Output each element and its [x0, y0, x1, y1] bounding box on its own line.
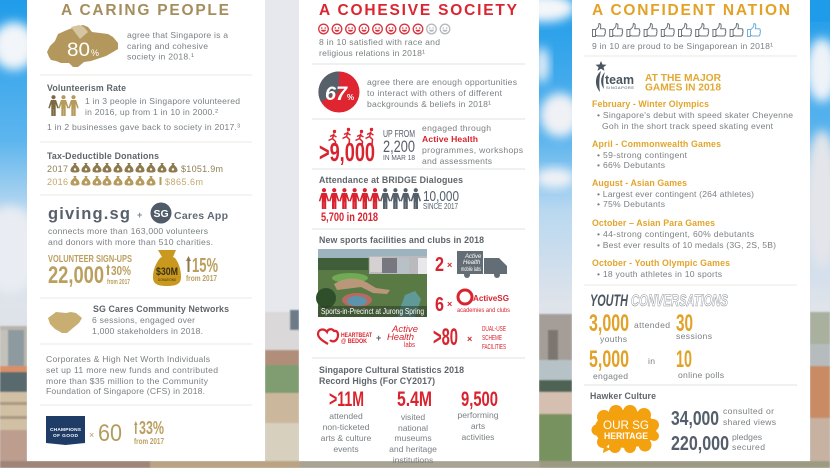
stat: 3,000 youths attended 30 sessions: 30 [676, 310, 693, 337]
text: active health: and assessments [422, 156, 492, 166]
stat: volunteer sign-ups [48, 253, 132, 289]
stat: 5,000 engaged in 10 online polls [589, 346, 724, 381]
list: asian para games: October – Asian Para Games [592, 218, 715, 228]
heading: a confident nation: A CONFIDENT NATION [592, 2, 790, 19]
stat: 5,700 in 2018: 5,700 in 2018 [321, 210, 378, 224]
stat: 6 activesg academies and clubs: × [447, 299, 452, 309]
list: commonwealth games: • 59-strong contingent [597, 150, 688, 160]
logo: team singapore: team [605, 72, 634, 87]
stat: 5,000 engaged in 10 online polls: in [648, 356, 655, 366]
stat: 5.4m visited: institutions [393, 455, 433, 465]
text: opportunities to interact: agree there are enough opportunities [367, 77, 517, 87]
icon: handshake [48, 312, 82, 333]
stat: 34,000 consulted: 34,000 [671, 408, 719, 430]
list: commonwealth games: • 66% Debutants [597, 160, 665, 170]
stat: 3,000 youths attended 30 sessions: youths [600, 334, 627, 344]
logo: sg cares app [150, 202, 228, 224]
stat: >80 dual-use scheme facilities: × [467, 334, 472, 344]
icon: singapore map 80% [47, 25, 118, 67]
list: asian para games: • 44-strong contingent, 60% debutants [597, 229, 754, 239]
stat: 5.4m visited: 5.4M [397, 388, 432, 411]
heading: youth conversations [590, 291, 728, 310]
stat: 3,000 youths attended 30 sessions: 3,000 [589, 310, 629, 337]
icon row: runners [328, 128, 374, 146]
stat: >80 dual-use scheme facilities [433, 324, 506, 351]
stat: volunteer sign-ups: VOLUNTEER SIGN-UPS [48, 253, 132, 265]
logo: heartbeat @ bedok: HEARTBEAT [341, 333, 372, 339]
chart: donations 2017: $1051.9m [181, 164, 223, 174]
stat: 3,000 youths attended 30 sessions: attended [634, 320, 670, 330]
list: winter olympics: February - Winter Olympics [592, 99, 709, 109]
stat: 5.4m visited: visited [401, 412, 425, 422]
text: corporates and cfs [46, 354, 218, 396]
text: corporates and cfs: more than $35 million to the Community [46, 376, 209, 386]
heading: volunteerism rate: Volunteerism Rate [47, 83, 126, 93]
stat: 6 activesg academies and clubs: ActiveSG [473, 293, 509, 303]
stat: donations up 15%: from 2017 [186, 273, 217, 283]
stat: 9,500 performing [457, 388, 499, 442]
logo: heartbeat @ bedok: @ BEDOK [341, 339, 368, 345]
text: race relations: religious relations in 2018¹ [319, 48, 425, 58]
text: volunteer rate [47, 96, 240, 132]
text: active health: Active Health [422, 134, 478, 144]
stat: 3,000 youths attended 30 sessions: sessions [676, 331, 712, 341]
text: corporates and cfs: Corporates & High Net Worth Individuals [46, 354, 210, 364]
heading: cultural statistics [319, 365, 464, 386]
chart: donations 2016 [47, 176, 203, 187]
text: giving.sg description: and donors with more than 510 charities. [48, 237, 213, 247]
icon row: thumbs up [592, 24, 761, 36]
icon row: smileys [319, 24, 450, 34]
badge: our sg heritage: HERITAGE [604, 431, 648, 442]
heading: at the major games: AT THE MAJOR [645, 72, 721, 84]
logo: giving.sg: giving.sg [48, 205, 130, 223]
heading: tax-deductible donations: Tax-Deductible Donations [47, 151, 159, 161]
stat: up from 2,200 [383, 129, 415, 162]
text: opportunities to interact [367, 77, 517, 109]
logo: sg cares app: Cares App [174, 210, 228, 222]
logo: active health labs: labs [404, 342, 415, 349]
stat: 220,000 pledges: 220,000 [671, 433, 729, 455]
text: active health: engaged through [422, 123, 491, 133]
badge: our sg heritage: OUR SG [603, 418, 649, 432]
chart: donations 2017: 2017 [47, 164, 68, 174]
icon: singapore map 80%: 80 [67, 40, 90, 61]
plus sign: + [376, 333, 381, 343]
stat: 6 activesg academies and clubs: 6 [435, 294, 444, 316]
stat: 5.4m visited: museums [394, 433, 432, 443]
stat: >80 dual-use scheme facilities: FACILITIES [482, 344, 506, 351]
text: sg cares community networks: 1,000 stakeholders in 2018. [92, 326, 203, 336]
text: caring statistic: society in 2018.¹ [127, 52, 194, 62]
stat: >80 dual-use scheme facilities: >80 [433, 324, 458, 351]
stat: >11m attended: arts & culture [321, 433, 372, 443]
stat: >11m attended: >11M [329, 388, 364, 411]
list: asian games: August - Asian Games [592, 178, 687, 188]
text: volunteer rate: 1 in 2 businesses gave back to society in 2017.³ [47, 122, 240, 132]
text: race relations: 8 in 10 satisfied with race and [319, 37, 440, 47]
stat: up 33%: 33% [139, 418, 164, 438]
text: active health [422, 123, 523, 166]
text: sg cares community networks: SG Cares Community Networks [93, 304, 229, 314]
panel: a caring people [27, 0, 265, 461]
text: race relations [319, 37, 440, 58]
logo: sg cares app: SG [154, 208, 169, 220]
list: asian para games [592, 218, 776, 250]
stat: volunteer sign-ups: 22,000 [48, 262, 104, 289]
stat: 5,000 engaged in 10 online polls: online polls [678, 370, 724, 380]
chart: donations 2016: $865.6m [165, 177, 203, 187]
stat: 2 mobile labs: Active [464, 254, 482, 260]
list: winter olympics [592, 99, 793, 131]
text: caring statistic: caring and cohesive [127, 41, 208, 51]
stat: 9,500 performing: activities [462, 432, 494, 442]
heading: youth conversations: CONVERSATIONS [631, 291, 728, 310]
heading: bridge dialogues: Attendance at BRIDGE Dialogues [319, 175, 463, 185]
list: asian games: • Largest ever contingent (264 athletes) [597, 189, 754, 199]
stat: 3,000 youths attended 30 sessions [589, 310, 712, 344]
logo: team singapore: SINGAPORE [606, 85, 634, 90]
text: volunteer rate: 1 in 3 people in Singapore volunteered [85, 96, 240, 106]
stat: 9,500 performing: arts [471, 421, 485, 431]
logo: active health labs: Active [391, 324, 418, 335]
icon: money bag $30m donations: $30M [156, 266, 178, 278]
text: corporates and cfs: Foundation of Singapore (CFS) in 2018. [46, 386, 205, 396]
text: giving.sg description [48, 226, 213, 247]
stat: 2 mobile labs: × [447, 260, 452, 270]
stat: >11m attended [321, 388, 372, 454]
text: caring statistic: agree that Singapore is a [127, 30, 228, 40]
stat: >80 dual-use scheme facilities: SCHEME [482, 335, 502, 342]
stat: champions of good 60: × [89, 430, 94, 440]
heading: a cohesive society: A COHESIVE SOCIETY [319, 2, 518, 19]
heading: hawker culture: Hawker Culture [590, 391, 656, 401]
list: youth olympic games: October - Youth Olympic Games [592, 258, 730, 268]
stat: 5.4m visited: national [398, 423, 428, 433]
list: winter olympics: Goh in the short track speed skating event [602, 121, 774, 131]
stat: 5.4m visited [389, 388, 437, 465]
icon: singapore map 80%: % [91, 48, 99, 58]
heading: cultural statistics: Record Highs (For CY2017) [319, 376, 435, 386]
icon: money bag $30m donations [153, 250, 181, 286]
stat: donations up 15% [186, 255, 218, 283]
list: asian games: • 75% Debutants [597, 199, 665, 209]
heading: youth conversations: YOUTH [590, 291, 628, 310]
chart: donations 2016: 2016 [47, 177, 68, 187]
logo: heartbeat @ bedok [318, 329, 372, 345]
icon: three people [48, 95, 79, 116]
text: volunteer rate: in 2016, up from 1 in 10 in 2000.² [85, 107, 218, 117]
stat: 9,500 performing: performing [457, 410, 499, 420]
stat: 5,000 engaged in 10 online polls: 10 [676, 346, 692, 373]
stat: 2 mobile labs [435, 251, 507, 278]
stat: volunteer sign-ups: from 2017 [107, 279, 130, 286]
stat: 9,500 performing: 9,500 [461, 388, 498, 411]
stat: 220,000 pledges: secured [732, 442, 765, 452]
stat: >11m attended: attended [329, 411, 363, 421]
heading: new sports facilities: New sports facilities and clubs in 2018 [319, 235, 484, 245]
text: sg cares community networks: 6 sessions, engaged over [92, 315, 195, 325]
stat: champions of good 60 [89, 420, 122, 447]
stat: 5.4m visited: and heritage [389, 444, 437, 454]
icon row: people attendance [319, 188, 421, 209]
stat: 34,000 consulted: shared views [723, 417, 776, 427]
heading: at the major games [645, 72, 721, 94]
photo: sports-in-precinct at jurong spring [316, 249, 427, 317]
panel: a confident nation [572, 0, 810, 461]
stat: >9,000: >9,000 [319, 137, 375, 167]
stat: champions of good 60: 60 [98, 420, 122, 447]
stat: 10,000 since 2017: 10,000 [423, 188, 459, 205]
panel: a cohesive society [299, 0, 539, 465]
chart: 67% pie: 67 [325, 84, 348, 105]
stat: 6 activesg academies and clubs: academies and clubs [457, 307, 511, 314]
list: youth olympic games: • 18 youth athletes in 10 sports [597, 269, 722, 279]
list: winter olympics: • Singapore's debut with speed skater Cheyenne [597, 110, 793, 120]
logo: champions of good: OF GOOD [53, 433, 79, 439]
chart: donations 2017 [47, 163, 223, 174]
list: commonwealth games [592, 139, 721, 170]
text: sg cares community networks [92, 304, 229, 336]
text: opportunities to interact: backgrounds & beliefs in 2018¹ [367, 99, 491, 109]
stat: 10,000 since 2017 [423, 188, 459, 211]
icon: money bag $30m donations: DONATIONS [158, 277, 176, 282]
heading: a caring people: A CARING PEOPLE [61, 2, 229, 19]
badge: our sg heritage [592, 405, 659, 453]
stat: up 33% [134, 418, 164, 446]
stat: up 33%: from 2017 [134, 436, 164, 446]
heading: cultural statistics: Singapore Cultural Statistics 2018 [319, 365, 464, 375]
stat: 10,000 since 2017: SINCE 2017 [423, 202, 458, 211]
plus sign: + [137, 210, 142, 220]
logo: active health labs [387, 324, 418, 349]
heading: at the major games: GAMES IN 2018 [645, 82, 721, 94]
text: opportunities to interact: to interact with others of different [367, 88, 503, 98]
stat: 6 activesg academies and clubs [435, 290, 511, 316]
text: corporates and cfs: set up 11 more new funds and contributed [46, 365, 218, 375]
stat: 220,000 pledges: pledges [732, 432, 762, 442]
stat: >11m attended: non-ticketed [323, 422, 370, 432]
stat: >11m attended: events [333, 444, 359, 454]
photo: sports-in-precinct at jurong spring: Sports-in-Precinct at Jurong Spring [321, 307, 424, 316]
logo: team singapore [596, 61, 634, 92]
text: caring statistic [127, 30, 228, 62]
list: asian games [592, 178, 754, 209]
stat: 5,000 engaged in 10 online polls: engaged [593, 371, 628, 381]
text: giving.sg description: connects more than 163,000 volunteers [48, 226, 208, 236]
stat: 2 mobile labs: Health [463, 260, 481, 266]
stat: 34,000 consulted [671, 406, 776, 430]
text: proud to be singaporean: 9 in 10 are proud to be Singaporean in 2018¹ [592, 41, 773, 51]
stat: up from 2,200: IN MAR 18 [383, 153, 415, 162]
stat: 2 mobile labs: 2 [435, 254, 444, 276]
list: asian para games: • Best ever results of 10 medals (3G, 2S, 5B) [597, 240, 776, 250]
stat: up from 2,200: UP FROM [383, 129, 415, 140]
logo: champions of good [46, 416, 85, 445]
stat: 5,000 engaged in 10 online polls: 5,000 [589, 346, 629, 373]
stat: >80 dual-use scheme facilities: DUAL-USE [482, 326, 506, 333]
logo: active health labs: Health [387, 332, 414, 343]
list: youth olympic games [592, 258, 730, 279]
stat: volunteer sign-ups: 30% [111, 263, 131, 278]
logo: champions of good: CHAMPIONS [50, 427, 82, 433]
stat: 34,000 consulted: consulted or [723, 406, 774, 416]
text: active health: programmes, workshops [422, 145, 523, 155]
list: commonwealth games: April - Commonwealth Games [592, 139, 721, 149]
stat: up from 2,200: 2,200 [383, 137, 415, 156]
stat: 2 mobile labs: mobile labs [461, 267, 481, 273]
chart: 67% pie: % [347, 93, 354, 102]
stat: donations up 15%: 15% [192, 255, 218, 277]
chart: 67% pie [318, 71, 360, 112]
